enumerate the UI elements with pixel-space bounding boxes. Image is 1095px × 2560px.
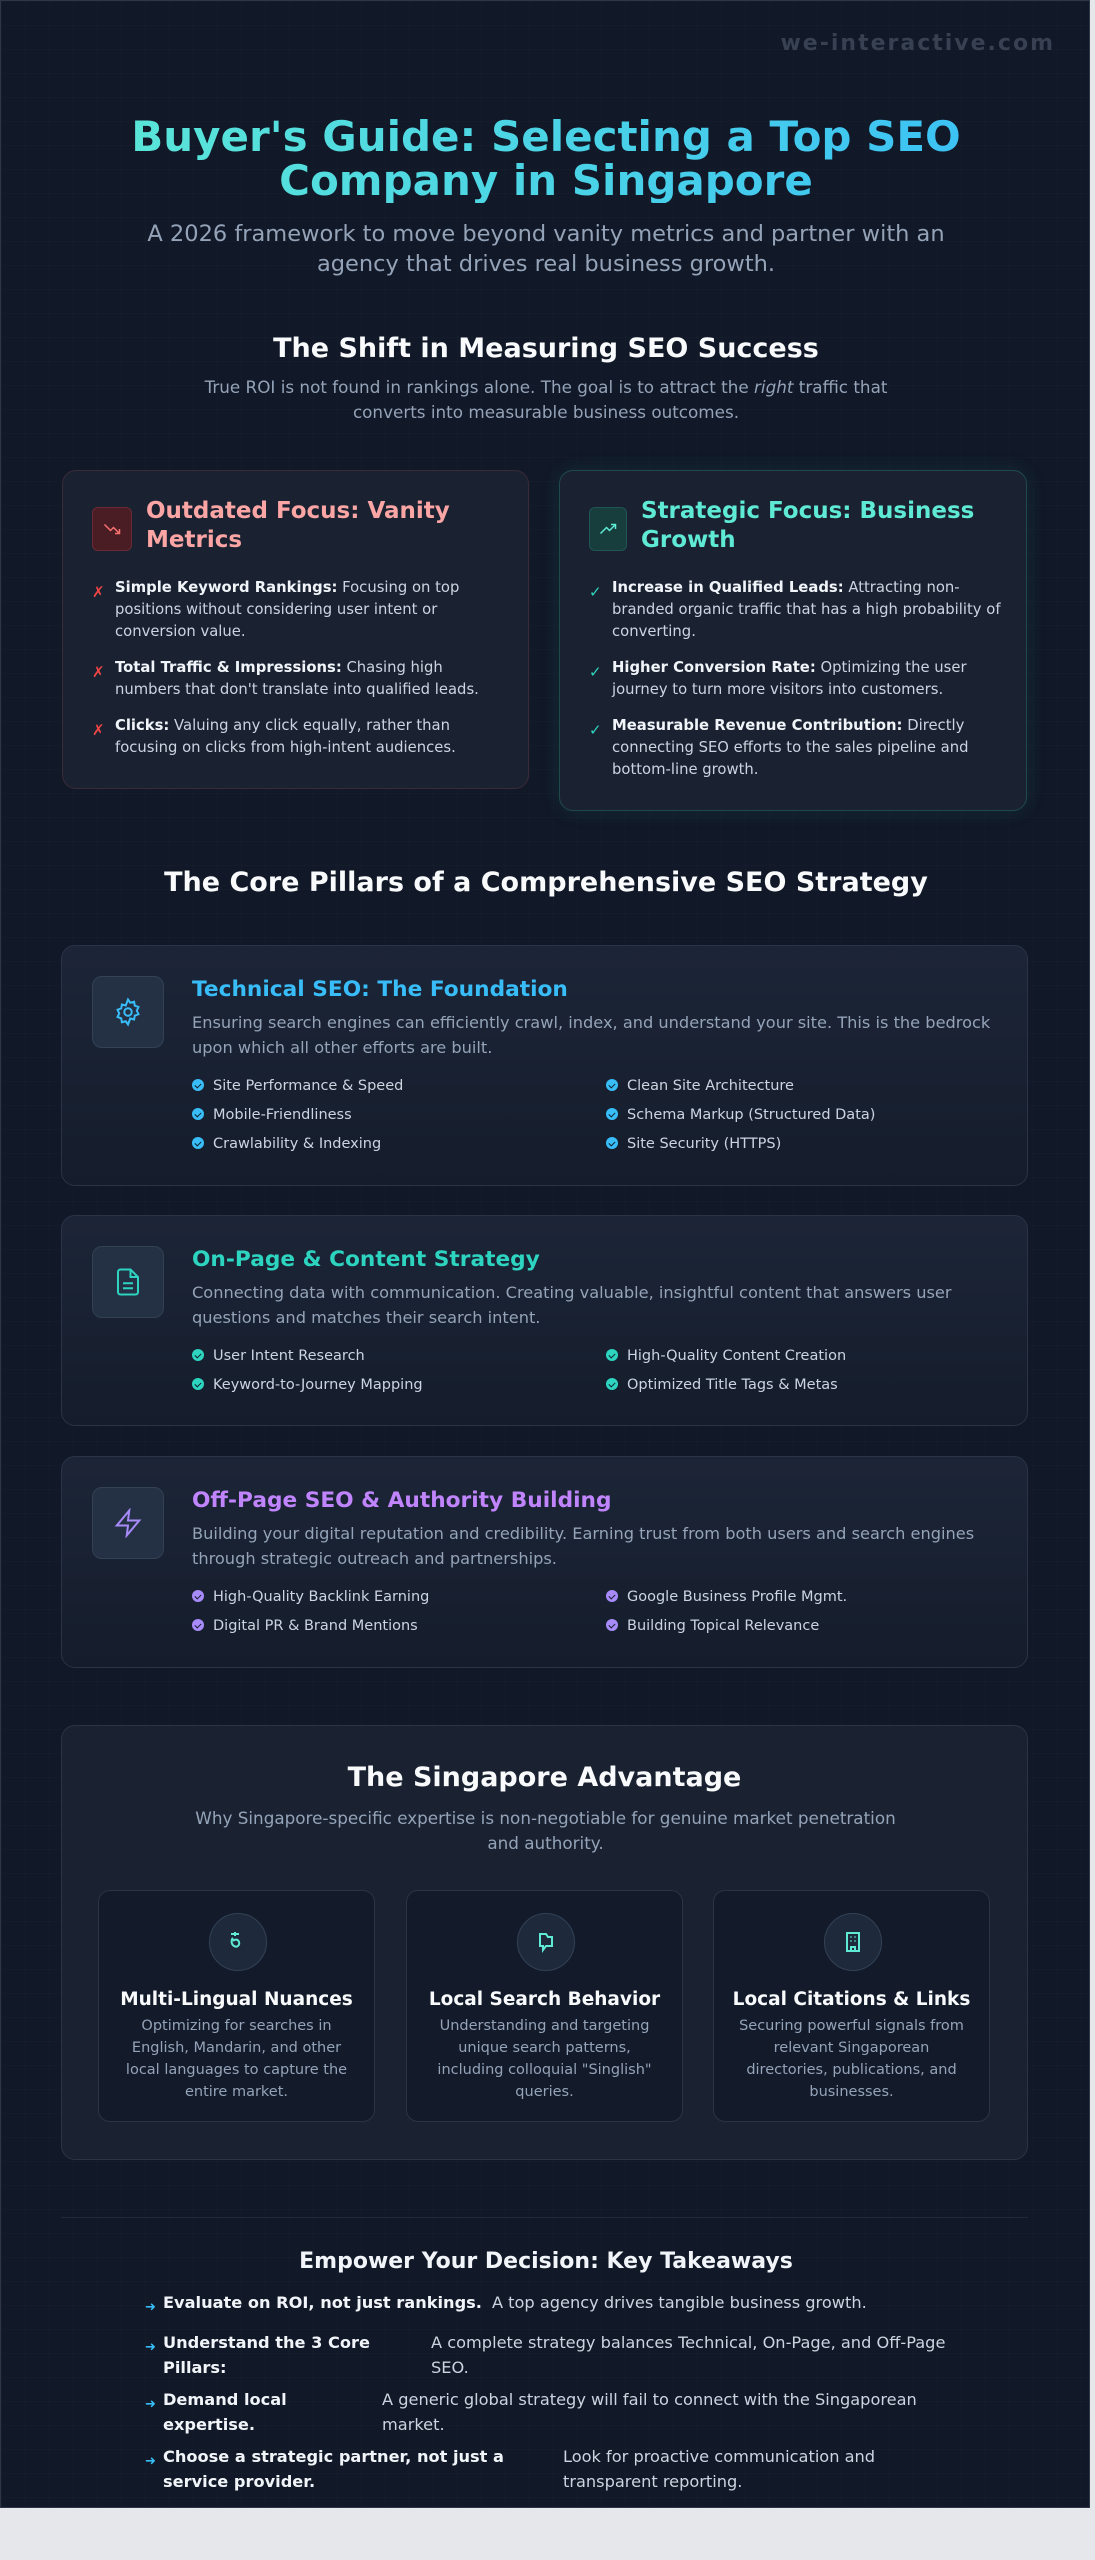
panel: strategic focus: ✓ <box>589 721 602 739</box>
takeaway 4: ➜ <box>145 2454 156 2469</box>
card: local citations <box>713 1890 990 2122</box>
checklist: High-Quality Content Creation <box>627 1348 846 1364</box>
title: Buyer's Guide: Selecting a Top SEO <box>131 112 961 161</box>
description: Ensuring search engines can efficiently crawl, index, and understand your site. This is the bedrock upon which all other efforts are built. <box>192 1013 990 1057</box>
takeaway 4: Look for proactive communication and transparent reporting. <box>563 2447 875 2491</box>
takeaway 3: ➜ <box>145 2397 156 2412</box>
card: local search <box>406 1890 683 2122</box>
subtitle: Why Singapore-specific expertise is non-negotiable for genuine market penetration and authority. <box>195 1808 896 1853</box>
panel: singapore advantage <box>61 1725 1028 2160</box>
heading: core pillars: The Core Pillars of a Comprehensive SEO Strategy <box>164 867 928 898</box>
takeaway 2: A complete strategy balances Technical, On-Page, and Off-Page SEO. <box>431 2333 945 2377</box>
takeaway 4: Choose a strategic partner, not just a service provider. <box>163 2447 504 2491</box>
card: multi-lingual <box>98 1890 375 2122</box>
checklist: Site Security (HTTPS) <box>627 1136 781 1152</box>
icon: trend down <box>92 507 132 551</box>
title: Off-Page SEO & Authority Building <box>192 1488 612 1513</box>
panel: outdated focus <box>62 470 529 789</box>
icon: language <box>209 1913 267 1971</box>
heading: The Singapore Advantage <box>348 1762 741 1793</box>
heading: takeaways: Empower Your Decision: Key Takeaways <box>299 2249 793 2274</box>
heading: shift: The Shift in Measuring SEO Success <box>273 333 819 364</box>
title: Company in Singapore <box>279 156 813 205</box>
item: Clicks: Valuing any click equally, rather than focusing on clicks from high-intent audiences. <box>115 717 456 756</box>
checklist: Building Topical Relevance <box>627 1618 819 1634</box>
icon: trend up <box>589 507 627 551</box>
takeaway 3: A generic global strategy will fail to connect with the Singaporean market. <box>382 2390 917 2434</box>
title: Technical SEO: The Foundation <box>192 977 568 1002</box>
card: multi-lingual: Optimizing for searches in English, Mandarin, and other local languages to capture the entire market. <box>126 2018 347 2100</box>
shift subtitle: True ROI is not found in rankings alone. The goal is to attract the right traffic that converts into measurable business outcomes. <box>205 377 887 422</box>
icon: gear <box>92 976 164 1048</box>
panel: strategic focus <box>559 470 1027 811</box>
checklist: Mobile-Friendliness <box>213 1107 352 1123</box>
checklist <box>192 1589 847 1634</box>
checklist: Digital PR & Brand Mentions <box>213 1618 418 1634</box>
title <box>1 115 1091 203</box>
checklist: Google Business Profile Mgmt. <box>627 1589 847 1605</box>
icon: lightning <box>92 1487 164 1559</box>
checklist: Optimized Title Tags & Metas <box>627 1377 838 1393</box>
panel: outdated focus: ✗ <box>92 721 105 739</box>
title: On-Page & Content Strategy <box>192 1247 540 1272</box>
heading: Outdated Focus: Vanity <box>146 498 450 524</box>
item: Measurable Revenue Contribution: Directly connecting SEO efforts to the sales pipeline and bottom-line growth. <box>612 717 969 778</box>
checklist: Schema Markup (Structured Data) <box>627 1107 875 1123</box>
panel: outdated focus: ✗ <box>92 583 105 601</box>
checklist: High-Quality Backlink Earning <box>213 1589 429 1605</box>
card: local citations: Local Citations & Links <box>733 1989 970 2010</box>
takeaway 2: Understand the 3 Core Pillars: <box>163 2333 370 2377</box>
checklist: User Intent Research <box>213 1348 365 1364</box>
checklist <box>192 1348 846 1393</box>
panel: strategic focus: ✓ <box>589 583 602 601</box>
takeaway 3: Demand local expertise. <box>163 2390 287 2434</box>
takeaway 1: A top agency drives tangible business growth. <box>492 2293 867 2312</box>
takeaway 4 <box>145 2447 875 2491</box>
icon: building <box>824 1913 882 1971</box>
checklist: Crawlability & Indexing <box>213 1136 381 1152</box>
watermark: we-interactive.com <box>780 31 1055 56</box>
panel: outdated focus: ✗ <box>92 663 105 681</box>
icon: document <box>92 1246 164 1318</box>
takeaway 1 <box>145 2293 867 2315</box>
takeaway 2: ➜ <box>145 2340 156 2355</box>
heading <box>146 498 450 553</box>
takeaway 1: ➜ <box>145 2300 156 2315</box>
heading: Growth <box>641 527 736 553</box>
checklist <box>192 1078 875 1152</box>
item: Increase in Qualified Leads: Attracting non-branded organic traffic that has a high probability of converting. <box>612 579 1001 640</box>
item: Total Traffic & Impressions: Chasing high numbers that don't translate into qualified leads. <box>115 659 479 698</box>
card: local search: Local Search Behavior <box>429 1989 660 2010</box>
pillar: off-page <box>61 1456 1028 1668</box>
heading: Metrics <box>146 527 242 553</box>
description: Connecting data with communication. Creating valuable, insightful content that answers user questions and matches their search intent. <box>192 1283 952 1327</box>
takeaway 3 <box>145 2390 917 2434</box>
pillar: on-page <box>61 1215 1028 1426</box>
card: local search: Understanding and targeting unique search patterns, including colloquial "Singlish" queries. <box>437 2018 652 2100</box>
card: multi-lingual: Multi-Lingual Nuances <box>120 1989 353 2010</box>
description: Building your digital reputation and credibility. Earning trust from both users and search engines through strategic outreach and partnerships. <box>192 1524 974 1568</box>
checklist: Clean Site Architecture <box>627 1078 794 1094</box>
takeaway 2 <box>145 2333 945 2377</box>
checklist: Keyword-to-Journey Mapping <box>213 1377 423 1393</box>
card: local citations: Securing powerful signals from relevant Singaporean directories, publications, and businesses. <box>739 2018 964 2100</box>
heading: Strategic Focus: Business <box>641 498 974 524</box>
panel: strategic focus: ✓ <box>589 663 602 681</box>
heading <box>641 498 974 553</box>
icon: chat <box>517 1913 575 1971</box>
subtitle: A 2026 framework to move beyond vanity metrics and partner with an agency that drives real business growth. <box>147 221 945 277</box>
item: Higher Conversion Rate: Optimizing the user journey to turn more visitors into customers. <box>612 659 967 698</box>
checklist: Site Performance & Speed <box>213 1078 403 1094</box>
item: Simple Keyword Rankings: Focusing on top positions without considering user intent or conversion value. <box>115 579 459 640</box>
takeaway 1: Evaluate on ROI, not just rankings. <box>163 2293 482 2312</box>
pillar: technical SEO <box>61 945 1028 1186</box>
